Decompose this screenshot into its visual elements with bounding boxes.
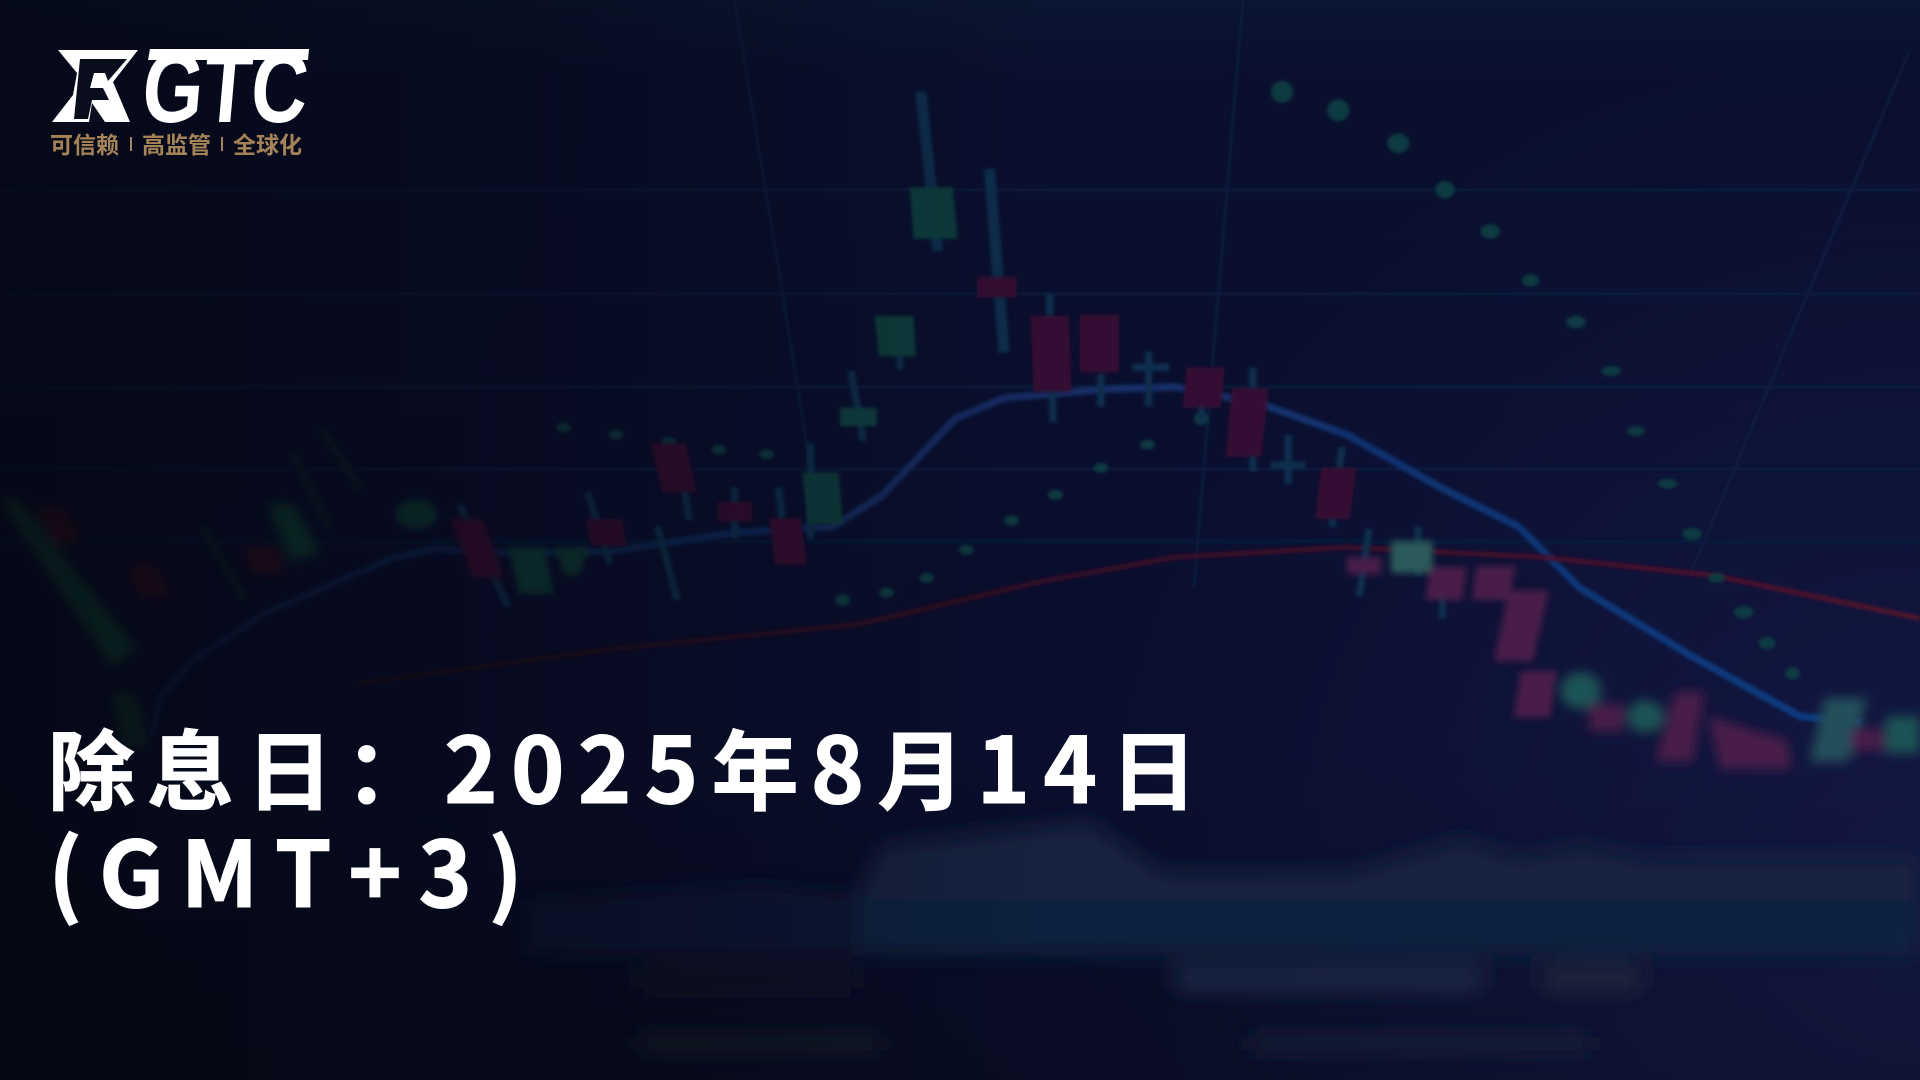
red candles (585, 277, 1357, 564)
blue moving average line (153, 387, 1861, 735)
title: ex-dividend date (48, 698, 1209, 934)
candle wicks (459, 92, 1442, 618)
title: ex-dividend date: 除息日：2025年8月14日 (48, 698, 1209, 830)
logo: GTC with tagline: 高监管 (142, 132, 211, 158)
red moving average line (358, 547, 1920, 683)
green candles (802, 187, 958, 524)
logo: GTC with tagline (50, 45, 313, 158)
icon: star emblem (52, 50, 138, 122)
tagline: 可信赖 (50, 132, 119, 158)
blurred right candles (1347, 541, 1558, 718)
blurred volume bars (527, 820, 1920, 1052)
green dots (556, 81, 1800, 680)
chart grid lines (0, 0, 1920, 588)
blurred left candles (202, 429, 590, 600)
logo: GTC with tagline: 全球化 (233, 132, 302, 158)
title: ex-dividend date: (GMT+3) (48, 802, 539, 934)
